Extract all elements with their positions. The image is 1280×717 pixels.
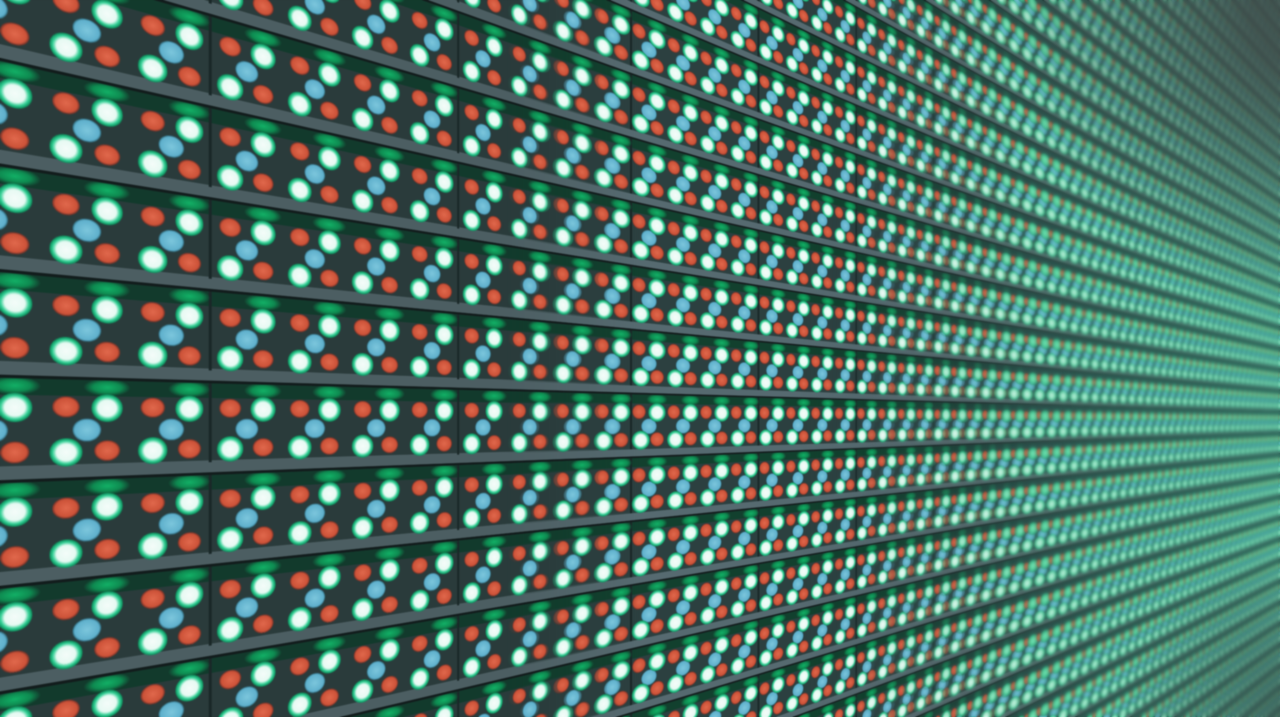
panel: far LED beads [870,0,1280,717]
panel: middle LED modules [510,0,1013,717]
LED cluster grid, middle [510,0,1013,717]
LED bead rows, far [870,0,1280,717]
depth of field blur at far end [838,0,1280,717]
